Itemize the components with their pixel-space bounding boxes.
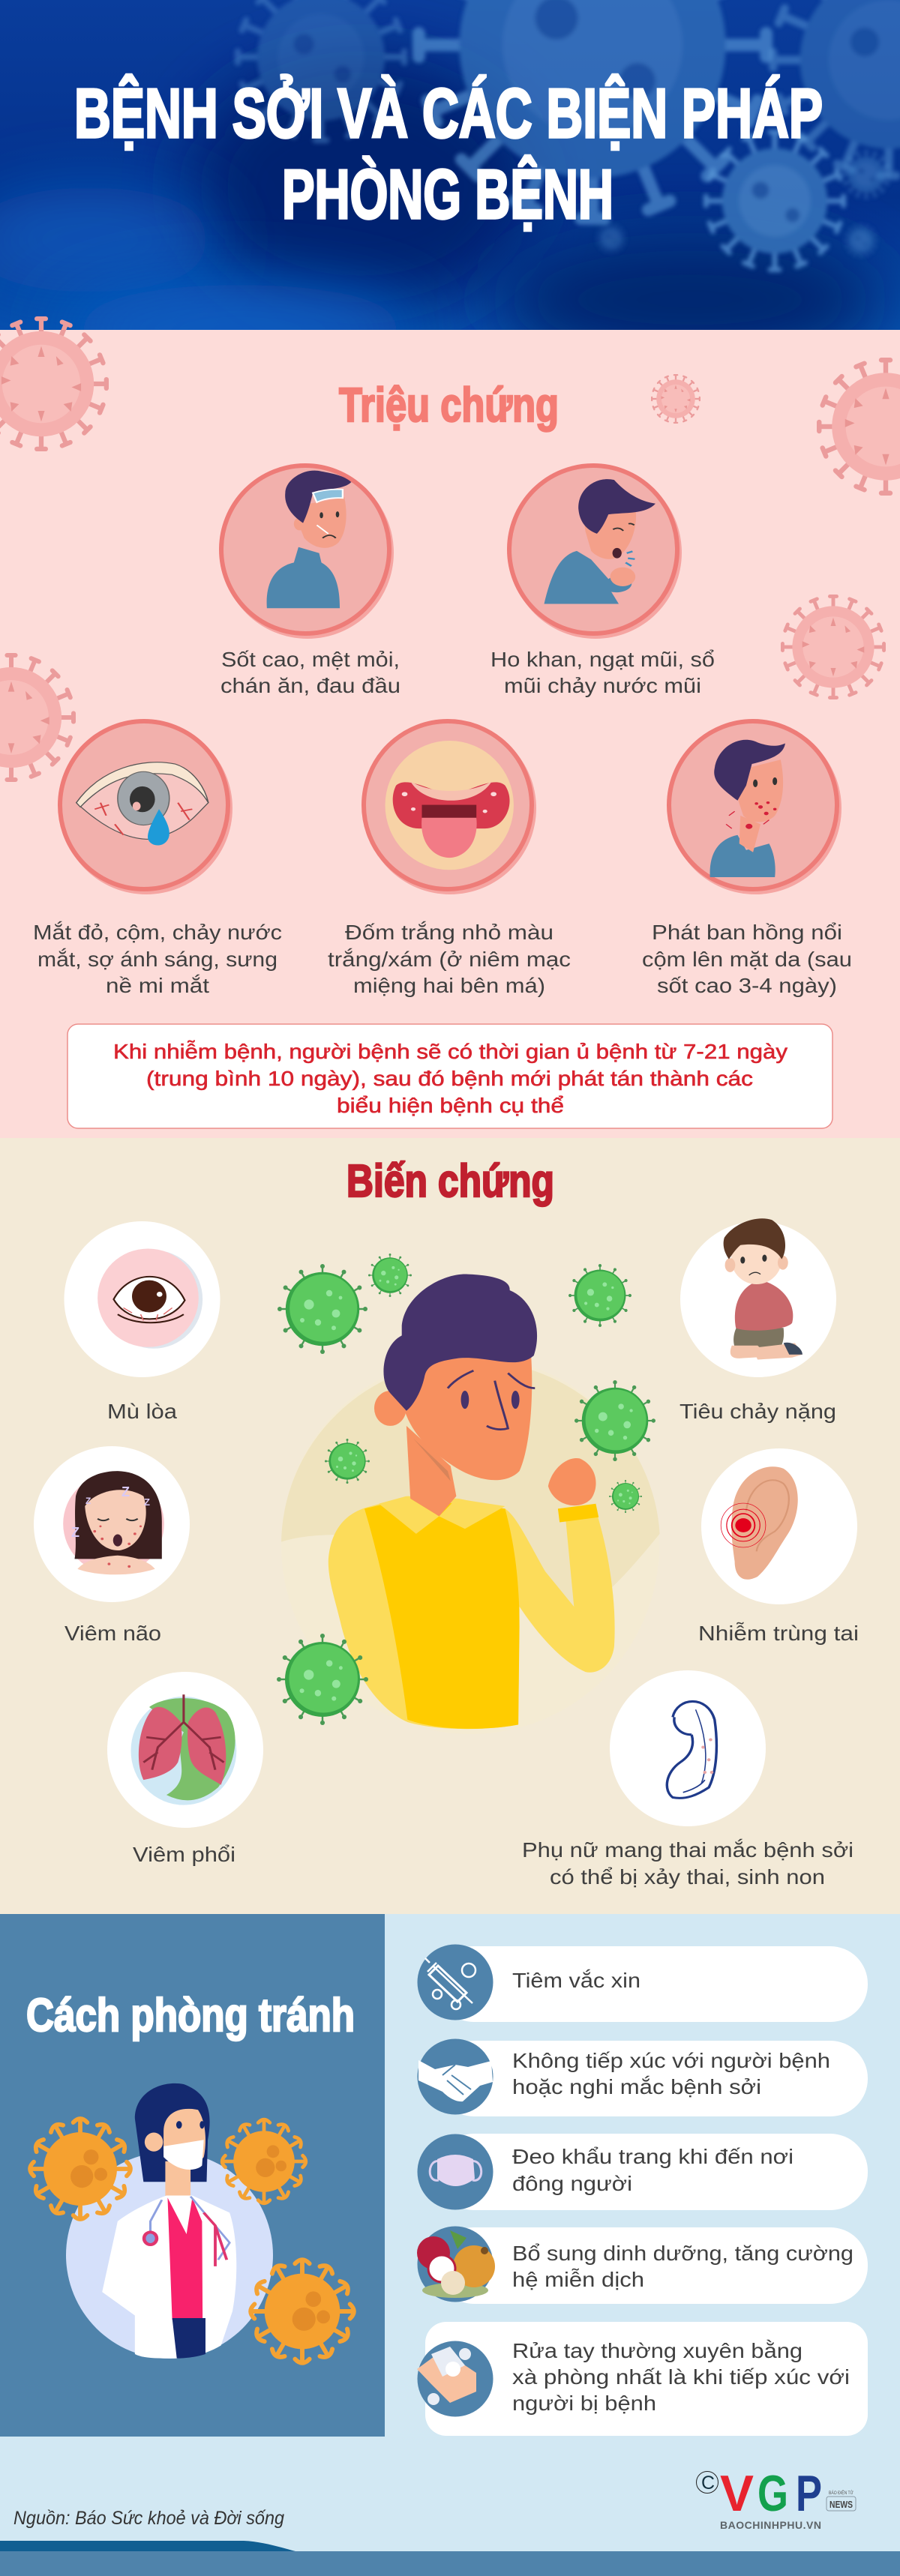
caption: Đốm trắng nhỏ màu — [345, 921, 554, 944]
zzz: Z — [86, 1496, 91, 1506]
text — [512, 2145, 794, 2195]
icon: lungs — [130, 1694, 236, 1805]
title: PHÒNG BỆNH — [282, 155, 614, 233]
text: Rửa tay thường xuyên bằng — [512, 2339, 802, 2362]
symptom: cough — [490, 466, 715, 697]
caption: Mắt đỏ, cộm, chảy nước — [33, 921, 282, 944]
zzz: Z — [71, 1525, 80, 1540]
text — [512, 2242, 854, 2291]
symptom: white spots — [328, 721, 571, 997]
caption — [522, 1838, 854, 1889]
complication: pneumonia — [107, 1672, 263, 1866]
caption: mắt, sợ ánh sáng, sưng — [38, 948, 278, 971]
symptom: red eyes — [33, 721, 282, 997]
logo: VGP: P — [796, 2465, 822, 2522]
text — [512, 2339, 850, 2415]
icon: man with fever — [267, 471, 351, 608]
source note: Nguồn: Báo Sức khoẻ và Đời sống — [14, 2508, 284, 2529]
caption: Ho khan, ngạt mũi, sổ — [490, 648, 715, 671]
icon: mask — [430, 2155, 482, 2186]
text: Tiêm vắc xin — [512, 1969, 640, 1992]
icon: sleepy woman — [63, 1471, 164, 1574]
text: người bị bệnh — [512, 2392, 656, 2415]
complication: ear infection — [698, 1448, 859, 1645]
caption: sốt cao 3-4 ngày) — [657, 974, 837, 997]
icon: boy — [724, 1218, 802, 1359]
complication: pregnancy — [522, 1670, 854, 1889]
item: hand washing — [417, 2322, 868, 2436]
logo: VGP: C — [701, 2473, 715, 2494]
item: nutrition — [417, 2227, 868, 2304]
text: Bổ sung dinh dưỡng, tăng cường — [512, 2242, 854, 2265]
text: Đeo khẩu trang khi đến nơi — [512, 2145, 794, 2168]
caption: Nhiễm trùng tai — [698, 1622, 859, 1645]
logo: VGP: BAOCHINHPHU.VN — [720, 2519, 821, 2531]
caption: mũi chảy nước mũi — [504, 674, 701, 697]
caption: trắng/xám (ở niêm mạc — [328, 948, 571, 971]
callout: incubation: Khi nhiễm bệnh, người bệnh sẽ có thời gian ủ bệnh từ 7-21 ngày — [113, 1040, 788, 1063]
heading: symptoms: Triệu chứng — [339, 378, 559, 432]
text — [512, 2049, 830, 2098]
heading: prevention: Cách phòng tránh — [26, 1990, 355, 2041]
caption: có thể bị xảy thai, sinh non — [550, 1865, 825, 1889]
text: xà phòng nhất là khi tiếp xúc với — [512, 2365, 850, 2389]
caption — [642, 921, 852, 997]
central figure — [275, 1275, 666, 1734]
logo: VGP: BÁO ĐIỆN TỬ — [829, 2490, 854, 2496]
caption: Phát ban hồng nổi — [652, 921, 842, 944]
caption: Viêm phổi — [133, 1843, 236, 1866]
logo: VGP: V — [720, 2465, 754, 2522]
icon: vegetables — [417, 2230, 495, 2298]
caption: Mù lòa — [107, 1400, 177, 1423]
logo: VGP: G — [758, 2465, 788, 2522]
decorative pink viruses — [0, 316, 900, 782]
zzz: Z — [122, 1484, 130, 1499]
heading: complications: Biến chứng — [346, 1155, 554, 1206]
caption: nề mi mắt — [106, 974, 209, 997]
complication: encephalitis — [34, 1446, 190, 1645]
icon: ear — [721, 1466, 798, 1580]
title — [74, 74, 823, 233]
icon: coughing man — [544, 479, 656, 604]
caption — [33, 921, 282, 997]
text: đông người — [512, 2172, 632, 2195]
logo: VGP — [696, 2465, 856, 2531]
panel: symptoms — [0, 316, 900, 1138]
icon: handshake — [418, 2060, 493, 2101]
symptom: rash — [642, 721, 852, 997]
panel: complications — [0, 1138, 900, 1914]
caption — [490, 648, 715, 697]
caption — [328, 921, 571, 997]
caption: miệng hai bên má) — [353, 974, 545, 997]
doctor illustration — [30, 2083, 354, 2363]
panel: prevention background — [0, 1914, 900, 2551]
text: Không tiếp xúc với người bệnh — [512, 2049, 830, 2072]
icon: syringe — [425, 1958, 476, 2009]
green viruses — [277, 1254, 656, 1725]
callout: incubation: biểu hiện bệnh cụ thể — [337, 1094, 564, 1117]
item: avoid contact — [417, 2039, 868, 2116]
caption: cộm lên mặt da (sau — [642, 948, 852, 971]
panel: prevention list — [417, 1945, 868, 2436]
text: hoặc nghi mắc bệnh sởi — [512, 2075, 761, 2098]
footer band — [0, 2541, 900, 2576]
caption: Tiêu chảy nặng — [680, 1400, 836, 1423]
icon: pregnant woman — [667, 1701, 716, 1798]
complication: blindness — [64, 1221, 220, 1423]
caption: chán ăn, đau đầu — [220, 674, 400, 697]
zzz: Z — [144, 1496, 150, 1508]
caption: Sốt cao, mệt mỏi, — [221, 648, 400, 671]
callout: incubation: (trung bình 10 ngày), sau đó bệnh mới phát tán thành các — [146, 1067, 753, 1090]
complication: diarrhea — [680, 1218, 836, 1423]
icon: man with rash — [710, 740, 785, 877]
caption — [220, 648, 400, 697]
icon: eye — [98, 1248, 202, 1349]
logo: VGP: NEWS — [830, 2499, 853, 2510]
zzz — [71, 1484, 150, 1540]
text: hệ miễn dịch — [512, 2268, 644, 2291]
item: vaccine — [417, 1945, 868, 2022]
icon: mouth — [386, 741, 514, 870]
icon: washing hands — [417, 2347, 476, 2405]
item: mask — [417, 2134, 868, 2210]
callout: incubation — [68, 1024, 832, 1128]
caption: Viêm não — [64, 1622, 161, 1645]
symptom: fever — [220, 466, 400, 697]
panel: prevention left — [0, 1914, 385, 2437]
hero banner — [0, 0, 900, 375]
caption: Phụ nữ mang thai mắc bệnh sởi — [522, 1838, 854, 1862]
icon: red eye — [76, 762, 208, 846]
